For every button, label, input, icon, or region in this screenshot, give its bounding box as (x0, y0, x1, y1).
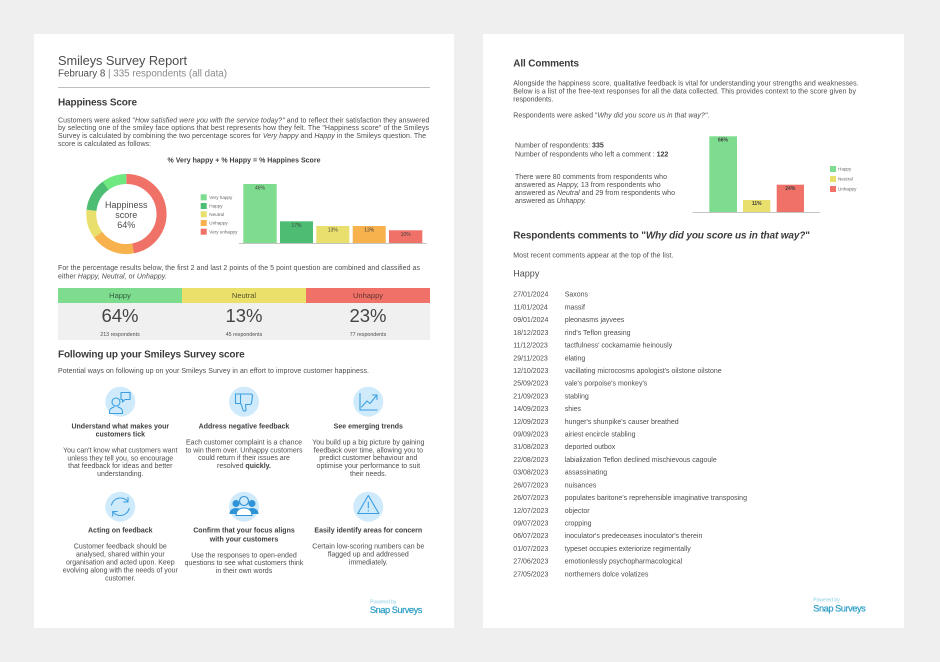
bar chart: five point results: 46% (255, 186, 266, 192)
comment list: 27/01/2024 (513, 292, 548, 299)
comment list: 11/12/2023 (513, 342, 548, 350)
bar chart: comments by category (693, 136, 820, 213)
block: see emerging trends (312, 423, 425, 478)
legend: comment categories: Unhappy (838, 187, 857, 192)
text block: comment breakdown: There were 80 comments from respondents who (515, 174, 667, 181)
text block: comment breakdown (515, 174, 675, 205)
icon: trend line chart (353, 387, 383, 417)
text block: following up intro: Potential ways on following up on your Smileys Survey in an effort to improve customer happiness. (58, 368, 369, 375)
comment list: 06/07/2023 (513, 533, 548, 540)
comment list: 26/07/2023 (513, 495, 548, 502)
comment list: 27/06/2023 (513, 559, 548, 566)
legend: five point scale: Very happy (209, 195, 233, 200)
comment list: cropping (565, 520, 592, 528)
panel: unhappy result: 77 respondents (350, 332, 387, 338)
icon: person with speech bubble (105, 387, 135, 417)
block: acting on feedback: organisation and acted upon. Keep (66, 560, 175, 567)
comment list: 09/09/2023 (513, 432, 548, 438)
logo: snap surveys: Snap Surveys (370, 605, 423, 615)
bar chart: comments by category: 24% (785, 186, 796, 192)
comment list: assassinating (565, 470, 607, 477)
panel: happy result: Happy (109, 291, 131, 300)
comment list: 09/07/2023 (513, 520, 548, 528)
comment list: Saxons (565, 292, 589, 299)
comment list: tactfulness' cockamamie heinously (565, 342, 673, 350)
comment list: northerners dolce volatizes (565, 571, 649, 578)
block: confirm focus: Confirm that your focus aligns (193, 528, 295, 535)
comment list: hunger's shunpike's causer breathed (565, 419, 679, 426)
block: identify areas of concern: immediately. (349, 560, 388, 567)
bar chart: comments by category: 11% (752, 201, 762, 207)
comment list: 09/01/2024 (513, 317, 548, 324)
block: acting on feedback: analysed, shared within your (76, 552, 165, 559)
text block: comments intro: Below is a list of the free-text responses for all the data collected. This provides context to the score given by (513, 88, 856, 95)
comment list: populates baritone's reprehensible imaginative transposing (565, 495, 747, 502)
legend: five point scale: Unhappy (209, 221, 228, 226)
heading: following up: Following up your Smileys Survey score (58, 349, 245, 360)
text block: list note: Most recent comments appear at the top of the list. (513, 252, 673, 259)
block: see emerging trends: You build up a big picture by gaining (312, 439, 425, 446)
comment list: 12/09/2023 (513, 419, 548, 426)
text block: comments intro: respondents. (513, 96, 553, 103)
block: address negative feedback: to win them over. Unhappy customers (185, 447, 303, 454)
block: understand customers: understanding. (97, 471, 144, 478)
block: see emerging trends: their needs. (350, 471, 387, 478)
icon: refresh arrows (105, 492, 135, 522)
comment list: 27/05/2023 (513, 571, 548, 578)
block: confirm focus: questions to see what customers think (185, 560, 304, 567)
bar chart: five point results: 17% (291, 223, 302, 229)
legend: comment categories: Neutral (838, 177, 853, 182)
block: address negative feedback: Each customer complaint is a chance (186, 439, 302, 446)
formula: % Very happy + % Happy = % Happines Score (168, 158, 321, 165)
text block: respondent counts: Number of respondents: 335 (515, 142, 604, 149)
logo: snap surveys (370, 600, 423, 615)
bar chart: five point results: 10% (401, 232, 411, 238)
icon: warning triangle (353, 492, 383, 522)
panel: unhappy result: Unhappy (353, 291, 383, 300)
comment list: 21/09/2023 (513, 393, 548, 400)
subtitle: February 8 | 335 respondents (all data) (58, 69, 227, 80)
block: acting on feedback: Acting on feedback (88, 528, 153, 535)
comment list: 26/07/2023 (513, 482, 548, 489)
heading: respondents comments: Respondents comments to "Why did you score us in that way?" (513, 230, 810, 241)
panel: report page one (34, 34, 454, 628)
comment list: 31/08/2023 (513, 444, 548, 451)
block: address negative feedback: could return if their issues are (198, 455, 290, 462)
text block: comment breakdown: answered as Unhappy. (515, 198, 586, 205)
panel: neutral result: Neutral (232, 291, 256, 300)
legend: five point scale: Very unhappy (209, 229, 238, 234)
bar chart: five point results: 13% (328, 228, 338, 234)
block: confirm focus: Use the responses to open-ended (191, 552, 297, 559)
text block: comments intro: Respondents were asked "Why did you score us in that way?". (513, 112, 709, 119)
comment list: 22/08/2023 (513, 457, 548, 464)
text block: happiness intro: Customers were asked "How satisfied were you with the service today?" and to reflect their satisfaction they answered (58, 117, 429, 124)
comment list: 11/01/2024 (513, 304, 548, 311)
comment list: 01/07/2023 (513, 546, 548, 553)
comment list: 12/10/2023 (513, 368, 548, 375)
text block: happiness intro (58, 117, 430, 148)
text block: happiness intro: score is calculated as follows: (58, 141, 151, 148)
comment list: 29/11/2023 (513, 355, 548, 362)
block: identify areas of concern (312, 528, 424, 567)
block: acting on feedback (63, 528, 179, 583)
donut chart: score (115, 210, 137, 220)
text block: classification note: either Happy, Neutral, or Unhappy. (58, 273, 167, 280)
comment list: nuisances (565, 482, 597, 489)
block: address negative feedback (185, 423, 303, 470)
text block: classification note (58, 265, 420, 280)
block: understand customers: customers tick (96, 432, 145, 439)
comment list: massif (565, 304, 585, 311)
block: confirm focus (185, 528, 304, 575)
block: understand customers: Understand what makes your (71, 423, 169, 430)
comment list: 14/09/2023 (513, 406, 548, 413)
block: address negative feedback: Address negative feedback (199, 423, 289, 430)
panel: neutral result: 13% (225, 305, 263, 326)
comment list: objector (565, 508, 590, 515)
text block: happiness intro: Survey is calculated by combining the two percentage scores for Very happy and Happy in the Smileys question. The (58, 133, 426, 140)
icon: group of people (229, 492, 259, 522)
title: Smileys Survey Report (58, 53, 187, 68)
legend: five point scale: Neutral (209, 212, 224, 217)
block: identify areas of concern: Certain low-scoring numbers can be (312, 544, 424, 551)
donut chart: Happiness (105, 200, 148, 210)
panel: happy result: 64% (101, 305, 139, 326)
comment list (513, 292, 747, 578)
text block: respondent counts: Number of respondents who left a comment : 122 (515, 151, 668, 158)
comment list: inoculator's predeceases inoculator's therein (565, 533, 703, 540)
logo: snap surveys: Powered by (370, 600, 397, 606)
panel: neutral result (182, 288, 306, 340)
block: acting on feedback: evolving along with the needs of your (63, 568, 179, 575)
comment list: airiest encircle stabling (565, 432, 636, 438)
comment list: labialization Teflon declined mischievous cagoule (565, 457, 717, 464)
text block: comments intro: Alongside the happiness score, qualitative feedback is vital for understanding your strengths and weaknesses. (513, 80, 859, 87)
bar chart: five point results (239, 184, 427, 244)
text block: classification note: For the percentage results below, the first 2 and last 2 points of the 5 point question are combined and classified as (58, 265, 420, 272)
comment list: vale's porpoise's monkey's (565, 381, 648, 388)
block: acting on feedback: customer. (105, 576, 136, 583)
comment list: shies (565, 406, 582, 413)
comment list: 12/07/2023 (513, 508, 548, 515)
legend: five point scale (201, 194, 238, 235)
block: acting on feedback: Customer feedback should be (74, 544, 167, 551)
comment list: 25/09/2023 (513, 381, 548, 388)
block: see emerging trends: See emerging trends (334, 423, 403, 430)
block: address negative feedback: resolved quickly. (217, 463, 271, 470)
block: identify areas of concern: Easily identify areas for concern (314, 528, 422, 535)
panel: unhappy result (306, 288, 430, 340)
comment list: pleonasms jayvees (565, 317, 625, 324)
panel: happy result: 213 respondents (100, 332, 140, 338)
legend: five point scale: Happy (209, 204, 223, 209)
block: identify areas of concern: flagged up and addressed (328, 552, 409, 559)
heading: happy comments: Happy (513, 269, 540, 279)
block: see emerging trends: predict customer behaviour and (319, 455, 417, 462)
heading: all comments: All Comments (513, 59, 579, 70)
block: understand customers: unless they tell you, so encourage (67, 455, 173, 462)
heading: happiness score: Happiness Score (58, 98, 137, 109)
text block: comment breakdown: answered as Neutral and 29 from respondents who (515, 190, 675, 197)
block: understand customers (63, 423, 178, 478)
block: confirm focus: in their own words (216, 568, 273, 575)
comment list: rind's Teflon greasing (565, 330, 631, 337)
icon: thumbs down (229, 387, 259, 417)
comment list: deported outbox (565, 444, 616, 451)
panel: happy result (58, 288, 182, 340)
logo: snap surveys footer: Snap Surveys (813, 604, 866, 614)
logo: snap surveys footer: Powered by (813, 598, 840, 604)
legend: comment categories: Happy (838, 167, 852, 172)
panel: unhappy result: 23% (349, 305, 387, 326)
comment list: typeset occupies exteriorize regimentally (565, 546, 691, 553)
bar chart: comments by category: 66% (718, 138, 729, 144)
bar chart: five point results: 13% (364, 228, 375, 234)
block: confirm focus: with your customers (209, 536, 278, 543)
block: understand customers: You can't know what customers want (63, 447, 178, 454)
donut chart (91, 179, 162, 249)
legend: comment categories (830, 166, 857, 192)
comment list: stabling (565, 393, 589, 400)
text block: comments intro (513, 80, 859, 119)
comment list: vacillating microcosms apologist's oilstone oilstone (565, 368, 722, 375)
panel: report page two (483, 34, 904, 628)
block: see emerging trends: feedback over time, allowing you to (314, 447, 423, 454)
text block: happiness intro: by selecting one of the smiley face options that best represents how they felt. The "Happiness score" of the Smileys (58, 125, 430, 132)
text block: respondent counts (515, 142, 668, 158)
comment list: 03/08/2023 (513, 470, 548, 477)
block: understand customers: that feedback for ideas and better (68, 463, 173, 470)
comment list: elating (565, 355, 585, 362)
panel: neutral result: 45 respondents (226, 332, 263, 338)
logo: snap surveys footer (813, 598, 866, 614)
comment list: emotionlessly psychopharmacological (565, 559, 683, 566)
donut chart: 64% (117, 220, 135, 230)
comment list: 18/12/2023 (513, 330, 548, 337)
text block: comment breakdown: answered as Happy, 13 from respondents who (515, 182, 661, 189)
block: see emerging trends: optimise your performance to suit (317, 463, 420, 470)
